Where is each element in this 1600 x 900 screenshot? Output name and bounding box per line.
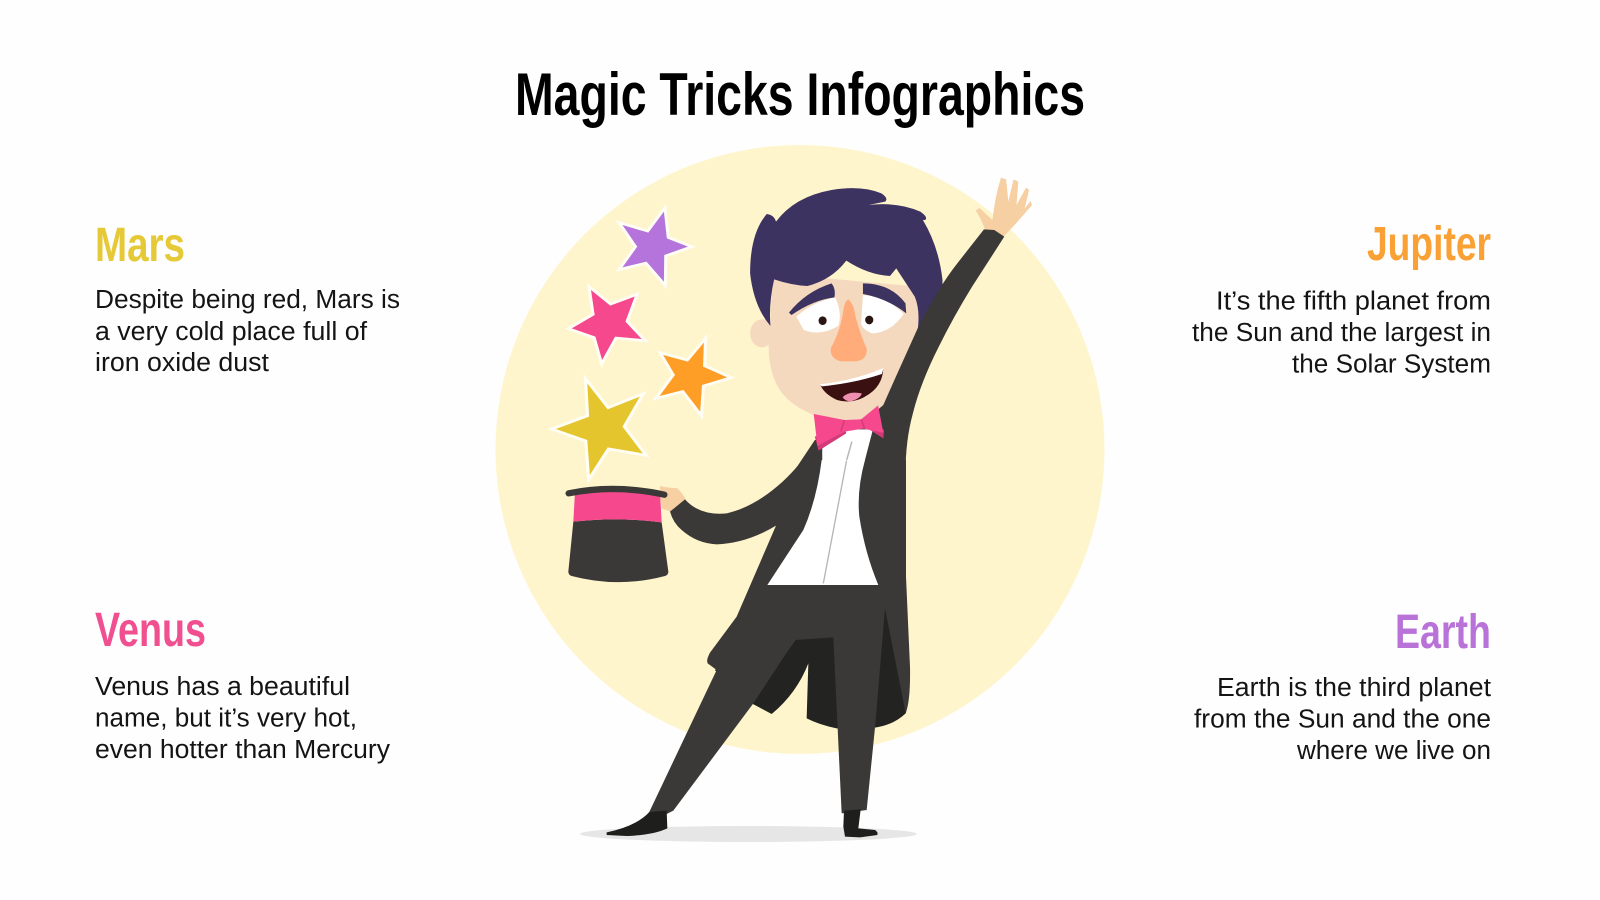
- text: Earth description: where we live on: [1296, 737, 1491, 765]
- heading: Venus: Venus: [95, 604, 206, 657]
- text: Jupiter description: It’s the fifth planet from: [1216, 288, 1491, 316]
- text: Jupiter description: the Sun and the largest in: [1192, 319, 1491, 347]
- panel: Mars: [95, 219, 400, 377]
- left shoe: [607, 811, 667, 836]
- text: Earth description: Earth is the third planet: [1217, 674, 1491, 702]
- shirt collar: [822, 429, 873, 461]
- face: [769, 273, 920, 427]
- hat brim: [569, 489, 664, 495]
- text: Venus description: name, but it’s very hot,: [95, 704, 357, 732]
- shirt seam top: [847, 442, 852, 460]
- right shoe: [843, 809, 878, 837]
- bow tie: [814, 405, 884, 451]
- pupils: [819, 316, 873, 325]
- hat crown: [568, 519, 668, 582]
- text: Venus description: Venus has a beautiful: [95, 673, 350, 701]
- panel: Jupiter: [1192, 218, 1491, 378]
- text: Mars description: Despite being red, Mars is: [95, 286, 400, 314]
- nose: [831, 299, 867, 361]
- heading: Jupiter: Jupiter: [1367, 218, 1491, 271]
- ground shadow: [580, 826, 917, 842]
- shirt: [767, 460, 878, 585]
- text: Jupiter description: the Solar System: [1292, 350, 1491, 378]
- top hat: [568, 489, 668, 582]
- star: yellow: [556, 383, 643, 475]
- coat tails: [715, 607, 906, 728]
- text: Mars description: [95, 286, 400, 377]
- panel: Venus: [95, 604, 390, 764]
- bow folds: [841, 419, 865, 432]
- shirt seam: [823, 460, 847, 583]
- jacket with raised arm: [798, 229, 1004, 473]
- coat and trousers: [648, 460, 910, 814]
- ear: [750, 319, 774, 347]
- star: pink: [572, 290, 642, 360]
- mouth: [820, 368, 883, 402]
- star: purple: [622, 212, 688, 282]
- panel: Earth: [1194, 606, 1491, 765]
- bow wings: [814, 405, 883, 446]
- hat band: [573, 492, 662, 522]
- text: Venus description: even hotter than Mercury: [95, 736, 390, 764]
- illustration: magician lower body and hat: [568, 460, 917, 842]
- background circle: [496, 145, 1104, 754]
- heading: Mars: Mars: [95, 219, 185, 272]
- tongue: [843, 393, 862, 401]
- text: Earth description: from the Sun and the one: [1194, 706, 1491, 734]
- star: orange: [659, 343, 727, 412]
- text: Jupiter description: [1192, 288, 1491, 378]
- head: [750, 188, 942, 427]
- bow wing shadows: [815, 423, 884, 451]
- text: Mars description: a very cold place full of: [95, 318, 368, 346]
- title: Magic Tricks Infographics: [515, 61, 1085, 128]
- text: Earth description: [1194, 674, 1491, 765]
- eyebrows: [789, 283, 906, 315]
- hair: [750, 188, 942, 330]
- icon: holding hand: [660, 486, 686, 512]
- text: Venus description: [95, 673, 390, 764]
- teeth: [820, 368, 884, 386]
- icon: raised hand: [976, 178, 1032, 237]
- heading: Earth: Earth: [1395, 606, 1491, 659]
- text: Mars description: iron oxide dust: [95, 349, 269, 377]
- illustration: collar and bow tie: [814, 405, 884, 461]
- eyes: [796, 295, 904, 333]
- stars: [556, 212, 727, 475]
- illustration: stars, head and raised arm: [556, 178, 1032, 475]
